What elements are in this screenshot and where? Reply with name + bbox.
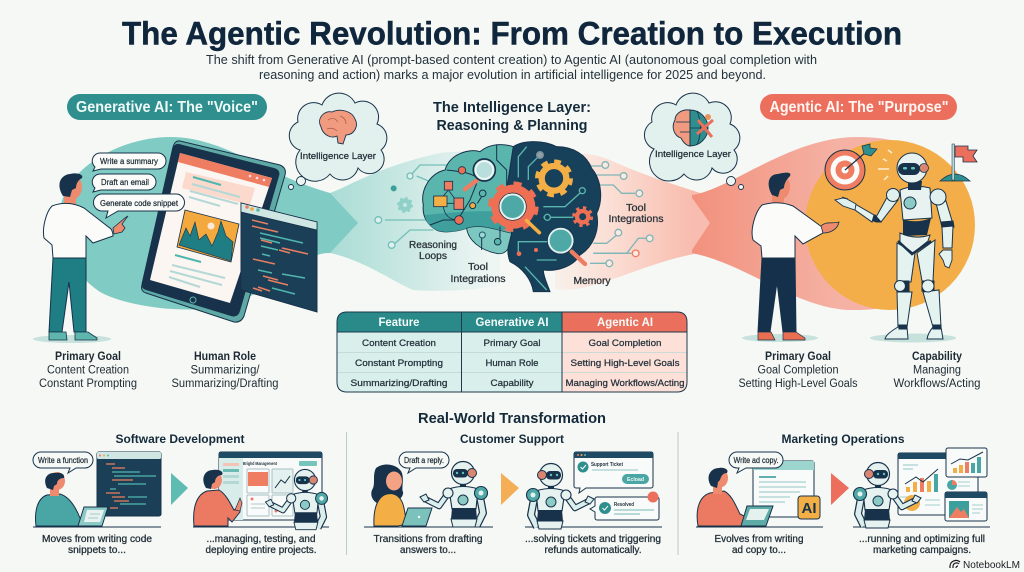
comparison table: Capability bbox=[490, 378, 534, 389]
robot right arm bbox=[936, 201, 954, 268]
robot mini support right bbox=[526, 464, 594, 529]
gear yellow bbox=[537, 162, 571, 195]
brain labels: Tool bbox=[626, 203, 646, 214]
subtitle: The shift from Generative AI (prompt-based content creation) to Agentic AI (autonomous goal completion with bbox=[206, 53, 817, 67]
captions: agentic: Workflows/Acting bbox=[894, 378, 980, 390]
captions: generative: Primary Goal bbox=[55, 351, 121, 363]
speech bubbles: Write a summary bbox=[100, 156, 159, 166]
person coral laptop bbox=[697, 468, 773, 526]
captions: generative: Summarizing/ bbox=[190, 364, 260, 376]
resolved window bbox=[590, 492, 659, 520]
brain labels: Tool bbox=[468, 262, 488, 273]
resolved window: Resolved bbox=[614, 502, 634, 508]
magnifier top bbox=[465, 159, 495, 189]
ticket window: Support Ticket bbox=[591, 462, 623, 468]
robot mini marketing bbox=[854, 462, 921, 528]
icon: brain bbox=[320, 110, 356, 144]
captions: agentic: Setting High-Level Goals bbox=[738, 378, 858, 390]
spark marks bbox=[878, 150, 892, 180]
circuit traces left bbox=[375, 165, 450, 248]
bubble: write ad copy: Write ad copy. bbox=[734, 455, 778, 465]
brain labels: Loops bbox=[419, 251, 447, 262]
panel: software development: snippets to... bbox=[68, 544, 126, 556]
robot mini support left bbox=[420, 462, 488, 527]
comparison table: Feature bbox=[378, 317, 420, 329]
robot mini software bbox=[265, 469, 328, 530]
dashboard window: Brighd Management bbox=[243, 461, 277, 466]
title: The Agentic Revolution: From Creation to Execution bbox=[122, 16, 902, 52]
arrow teal bbox=[171, 473, 188, 505]
panel: customer support: Customer Support bbox=[460, 432, 564, 446]
heading: real-world transformation: Real-World Transformation bbox=[418, 411, 606, 427]
captions: agentic: Managing bbox=[913, 364, 961, 376]
caption left: Moves from writing code bbox=[42, 533, 152, 545]
flag icon bbox=[940, 144, 977, 181]
caption left: Evolves from writing bbox=[714, 533, 804, 545]
gear small bbox=[574, 208, 592, 226]
captions: agentic: Goal Completion bbox=[758, 364, 838, 376]
captions: generative: Human Role bbox=[194, 351, 256, 363]
panel: marketing operations bbox=[696, 432, 990, 556]
bubble: draft a reply bbox=[399, 452, 449, 473]
bubble: write a function: Write a function bbox=[38, 455, 88, 465]
bubble: draft a reply: Draft a reply. bbox=[404, 455, 444, 465]
panel: marketing operations: Marketing Operations bbox=[782, 432, 905, 446]
ticket window bbox=[574, 452, 653, 493]
brain right hemisphere bbox=[507, 142, 601, 292]
brain illustration bbox=[375, 142, 653, 292]
speech bubbles: Draft an email bbox=[101, 177, 149, 187]
captions: agentic bbox=[738, 351, 980, 390]
brain labels: Memory bbox=[574, 276, 610, 287]
robot torso bbox=[900, 186, 932, 220]
robot left arm bbox=[835, 192, 898, 222]
subtitle: reasoning and action) marks a major evolution in artificial intelligence for 2025 and beyond. bbox=[259, 68, 766, 82]
flow band: generative to intelligence bbox=[60, 137, 500, 310]
icon: brain, globe and tools bbox=[673, 110, 713, 146]
person left: human prompting bbox=[33, 173, 128, 343]
caption right: ...managing, testing, and bbox=[206, 533, 316, 545]
brain labels: Integrations bbox=[450, 274, 506, 285]
panel: customer support: refunds automatically. bbox=[544, 544, 642, 556]
caption left: Transitions from drafting bbox=[374, 533, 483, 545]
bubble: write ad copy bbox=[729, 452, 783, 473]
thought bubble right: Intelligence Layer bbox=[655, 149, 731, 160]
AI badge: AI bbox=[802, 500, 816, 517]
brain left hemisphere bbox=[423, 145, 513, 254]
center heading bbox=[433, 100, 591, 134]
comparison table: Primary Goal bbox=[484, 338, 540, 349]
comparison table: Constant Prompting bbox=[355, 358, 443, 369]
small chart window bbox=[946, 448, 987, 477]
NotebookLM watermark: NotebookLM bbox=[963, 560, 1020, 571]
panel: software development: deploying entire projects. bbox=[206, 544, 316, 556]
pill heading: generative AI bbox=[67, 94, 267, 120]
bubble: write a function bbox=[33, 452, 93, 473]
comparison table: Setting High-Level Goals bbox=[570, 358, 680, 369]
comparison table: Content Creation bbox=[362, 338, 436, 349]
target icon bbox=[825, 144, 877, 190]
captions: generative bbox=[39, 351, 278, 390]
comparison table: Human Role bbox=[486, 358, 538, 369]
woman with laptop bbox=[371, 464, 432, 526]
code window small bbox=[97, 452, 161, 516]
thought bubble left bbox=[288, 93, 387, 190]
captions: generative: Summarizing/Drafting bbox=[172, 378, 278, 390]
arrow orange bbox=[501, 473, 519, 505]
dashboard window bbox=[219, 452, 322, 520]
pill heading: agentic AI: Agentic AI: The "Purpose" bbox=[770, 99, 948, 116]
center heading: The Intelligence Layer: bbox=[433, 100, 591, 116]
panel: software development: Software Development bbox=[116, 432, 244, 446]
captions: agentic: Capability bbox=[912, 351, 963, 363]
panel: software development bbox=[33, 432, 329, 556]
comparison table: Summarizing/Drafting bbox=[350, 378, 448, 389]
ticket window: Ecload bbox=[627, 477, 644, 483]
speech bubbles: Generate code snippet bbox=[100, 198, 179, 208]
comparison table: Agentic AI bbox=[597, 317, 653, 329]
comparison table: Goal Completion bbox=[588, 338, 662, 349]
panel: customer support bbox=[364, 432, 662, 556]
ad copy window bbox=[753, 461, 814, 517]
pill heading: generative AI: Generative AI: The "Voice" bbox=[76, 99, 258, 116]
circuit traces right bbox=[578, 162, 653, 267]
center heading: Reasoning & Planning bbox=[436, 118, 588, 134]
captions: generative: Content Creation bbox=[47, 364, 129, 376]
robot legs bbox=[885, 240, 943, 339]
flow chart nodes bbox=[434, 167, 466, 224]
person with laptop bbox=[35, 472, 108, 526]
robot big bbox=[835, 153, 956, 342]
caption right: ...running and optimizing full bbox=[859, 533, 985, 545]
comparison table: Managing Workflows/Acting bbox=[566, 378, 684, 389]
panel: marketing operations: marketing campaigns. bbox=[873, 544, 971, 556]
flow band: intelligence to agentic bbox=[555, 137, 975, 310]
thought bubble right bbox=[644, 93, 744, 190]
inner circuits bbox=[518, 147, 585, 290]
brain labels: Integrations bbox=[608, 214, 664, 225]
code window bbox=[241, 203, 317, 312]
panel: customer support: answers to... bbox=[400, 544, 456, 556]
pill heading: agentic AI bbox=[760, 94, 957, 120]
person orange bbox=[194, 470, 242, 526]
comparison table: Generative AI bbox=[476, 317, 548, 329]
brain labels: Reasoning bbox=[409, 240, 457, 251]
person right: human directing bbox=[742, 173, 839, 342]
thought bubble left: Intelligence Layer bbox=[300, 151, 376, 162]
comparison table bbox=[337, 312, 687, 392]
captions: agentic: Primary Goal bbox=[765, 351, 831, 363]
magnifier bottom bbox=[547, 227, 585, 264]
speech bubbles bbox=[92, 153, 184, 218]
tablet illustration bbox=[142, 141, 285, 322]
robot head bbox=[908, 181, 922, 190]
AI badge bbox=[798, 496, 820, 519]
captions: generative: Constant Prompting bbox=[39, 378, 137, 390]
caption right: ...solving tickets and triggering bbox=[525, 533, 661, 545]
arrow coral bbox=[831, 473, 849, 505]
subtitle bbox=[206, 53, 817, 82]
small image window bbox=[945, 492, 987, 521]
panel: marketing operations: ad copy to... bbox=[732, 544, 786, 556]
gear red with magnifier bbox=[491, 184, 539, 233]
analytics window bbox=[898, 453, 978, 515]
brain labels bbox=[409, 203, 664, 287]
